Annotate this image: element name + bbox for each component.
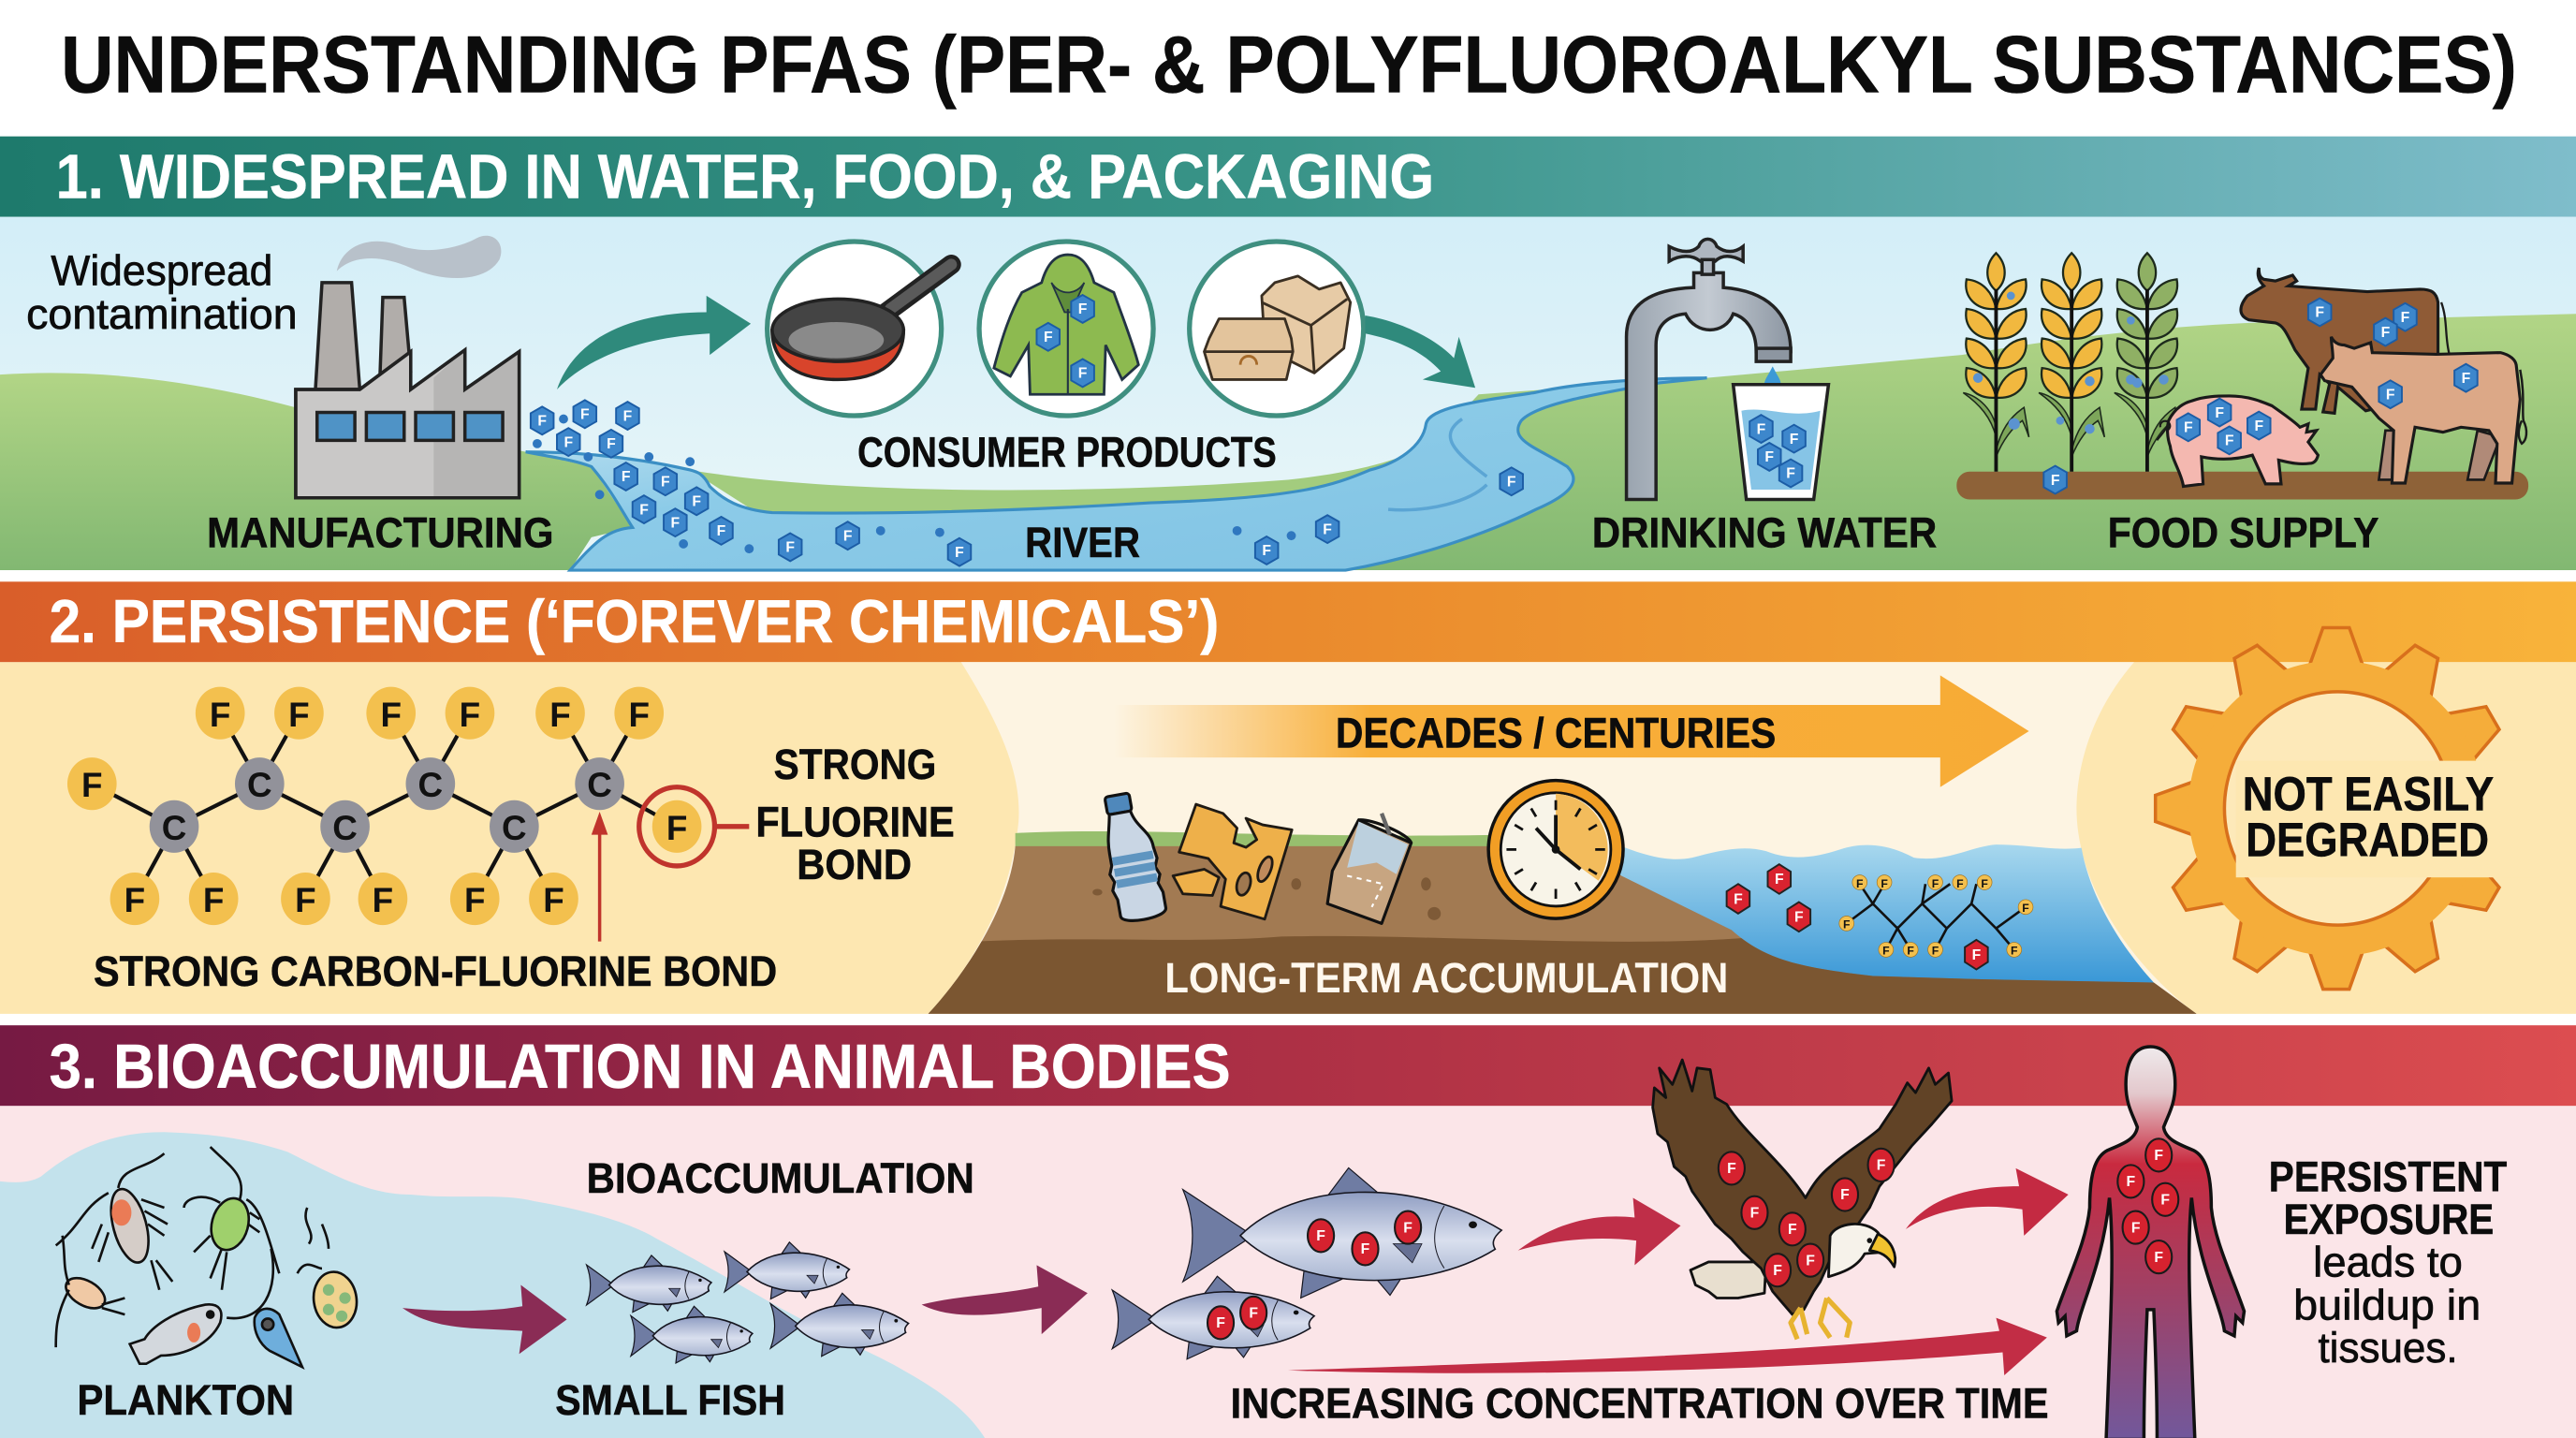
icon: medium fish: F [1216, 1315, 1225, 1331]
PFAS particles leaving factory into river: F [537, 414, 547, 430]
arrow: decades / centuries [1114, 675, 2029, 787]
small PFAS molecule in water: F [2011, 945, 2018, 958]
icon: large fish: F [1316, 1228, 1325, 1244]
soil strip [1956, 472, 2528, 500]
molecule: carbon-fluorine chain: F [124, 881, 145, 919]
icon: eagle: F [1806, 1253, 1815, 1269]
panel: section 3 bioaccumulation [0, 1025, 2576, 1438]
landscape background [0, 217, 2576, 570]
label: increasing concentration over time: INCREASING CONCENTRATION OVER TIME [1231, 1380, 2049, 1428]
icon: pig: F [2254, 418, 2263, 434]
labels section 1 [207, 428, 2378, 566]
icon: plankton group [56, 1147, 360, 1367]
PFAS particles leaving factory into river: F [639, 502, 649, 518]
molecule: carbon-fluorine chain: F [210, 696, 230, 734]
panel: section 2 persistence [0, 581, 2576, 1019]
molecule: carbon-fluorine chain: F [628, 696, 650, 734]
small PFAS molecule in water [1839, 875, 2033, 958]
icon: crops [1963, 253, 2180, 472]
PFAS particles leaving factory into river: F [843, 528, 853, 544]
icon: rain jacket: F [1078, 301, 1088, 317]
labels: strong fluorine bond: BOND [797, 841, 912, 888]
molecule: carbon-fluorine chain: F [288, 696, 310, 734]
river [526, 378, 1707, 570]
molecule: carbon-fluorine chain: C [502, 809, 527, 847]
PFAS hexagons in water: F [1972, 947, 1982, 963]
molecule: carbon-fluorine chain: F [543, 881, 564, 919]
small PFAS molecule in water: F [1981, 877, 1988, 890]
PFAS particles leaving factory into river: F [564, 434, 573, 450]
labels section 1: DRINKING WATER [1592, 508, 1937, 556]
icon: small fish school [587, 1242, 909, 1363]
arrow: fish to eagle [1518, 1197, 1680, 1265]
icon: glass of water: F [1764, 449, 1774, 465]
icon: rain jacket: F [1078, 366, 1088, 382]
molecule: carbon-fluorine chain: C [162, 809, 186, 847]
icon: medium fish: F [1249, 1306, 1258, 1322]
icon: human body: F [2127, 1174, 2136, 1190]
molecule: carbon-fluorine chain: F [549, 696, 571, 734]
icon: pig [2157, 396, 2318, 487]
section 2 heading band [0, 581, 2576, 662]
arrow: products to river [1365, 315, 1475, 388]
section 3 heading band: 3. BIOACCUMULATION IN ANIMAL BODIES [50, 1033, 1231, 1102]
icon: pig: F [2215, 405, 2224, 421]
PFAS particles leaving factory into river [531, 400, 1523, 566]
PFAS particles leaving factory into river: F [622, 469, 631, 485]
label: strong carbon-fluorine bond: STRONG CARBON-FLUORINE BOND [94, 947, 777, 995]
water body [1610, 844, 2154, 986]
icon: glass of water [1734, 385, 1828, 500]
text block: persistent exposure: tissues. [2318, 1324, 2458, 1372]
icon: tap [1627, 239, 1791, 500]
arrow: to carbon-fluorine bond [592, 812, 607, 942]
labels: strong fluorine bond: STRONG [774, 741, 936, 788]
panel: section 1 widespread [0, 137, 2576, 570]
PFAS particles leaving factory into river: F [1323, 521, 1332, 537]
icon: eagle: F [1773, 1263, 1782, 1279]
molecule: carbon-fluorine chain: F [464, 881, 485, 919]
molecule: carbon-fluorine chain: C [418, 766, 443, 804]
molecule: carbon-fluorine chain: F [203, 881, 224, 919]
label: widespread contamination [26, 247, 298, 338]
arrow: factory to products [557, 296, 751, 389]
icon: large fish [1183, 1167, 1501, 1298]
text block: persistent exposure: leads to [2313, 1239, 2463, 1286]
icon: brown cow: F [2401, 310, 2410, 326]
PFAS particles leaving factory into river: F [955, 545, 964, 561]
arrow: increasing concentration [1288, 1318, 2047, 1375]
icon: tan cow [2320, 337, 2526, 483]
small PFAS molecule in water: F [1882, 945, 1890, 958]
icon: food packaging [1190, 242, 1364, 416]
icon: brown cow [2241, 268, 2450, 413]
icon: brown cow: F [2315, 305, 2324, 321]
icon: pig: F [2184, 420, 2193, 436]
icon: tan cow: F [2462, 371, 2471, 387]
icon: human body [2056, 1047, 2244, 1438]
icon: glass of water: F [1790, 432, 1799, 448]
icon: clock [1488, 781, 1623, 918]
icon: large fish: F [1403, 1220, 1412, 1236]
icon: eagle: F [1788, 1222, 1797, 1238]
text block: persistent exposure: EXPOSURE [2284, 1196, 2494, 1243]
molecule: carbon-fluorine chain: F [666, 809, 687, 847]
section 2 heading band: 2. PERSISTENCE (‘FOREVER CHEMICALS’) [50, 587, 1219, 655]
labels: plankton and small fish [77, 1376, 785, 1424]
text block: persistent exposure: buildup in [2293, 1281, 2481, 1328]
label: widespread contamination: Widespread [51, 247, 272, 295]
text block: persistent exposure [2269, 1152, 2507, 1372]
PFAS particles leaving factory into river: F [623, 408, 633, 424]
labels section 1: FOOD SUPPLY [2108, 508, 2378, 556]
small PFAS molecule in water: F [1881, 877, 1888, 890]
molecule: carbon-fluorine chain: F [380, 696, 402, 734]
icon: gear [2156, 627, 2539, 990]
text block: persistent exposure: PERSISTENT [2269, 1152, 2507, 1200]
labels: plankton and small fish: SMALL FISH [555, 1376, 785, 1424]
section 1 heading band [0, 137, 2576, 217]
label: long-term accumulation: LONG-TERM ACCUMULATION [1164, 954, 1728, 1002]
molecule: carbon-fluorine chain: C [332, 809, 358, 847]
section 2 background [0, 662, 2576, 1014]
PFAS particles leaving factory into river: F [607, 436, 616, 452]
molecule: carbon-fluorine chain: C [587, 766, 612, 804]
molecule: carbon-fluorine chain: F [373, 881, 393, 919]
small PFAS molecule in water: F [1907, 945, 1914, 958]
PFAS hexagons in water [1727, 864, 1988, 970]
PFAS particles leaving factory into river: F [661, 475, 670, 491]
water region [0, 1132, 986, 1438]
icon: smoke [337, 236, 501, 278]
PFAS particles leaving factory into river: F [1507, 475, 1516, 491]
PFAS hexagons in water: F [1775, 872, 1784, 888]
label: not easily degraded: DEGRADED [2246, 813, 2489, 866]
labels section 1: RIVER [1025, 519, 1140, 566]
section 3 background [0, 1106, 2576, 1438]
PFAS hexagons in water: F [1794, 910, 1804, 926]
small PFAS molecule in water: F [1932, 877, 1939, 890]
icon: tan cow: F [2386, 387, 2395, 403]
icon: human body: F [2154, 1250, 2163, 1266]
icon: factory [296, 283, 520, 498]
PFAS particles leaving factory into river: F [692, 494, 701, 510]
icon: eagle [1653, 1060, 1952, 1339]
labels: strong fluorine bond [755, 741, 955, 888]
icon: non-stick pan [768, 242, 951, 416]
section 3 heading band [0, 1025, 2576, 1106]
icon: human body: F [2154, 1148, 2163, 1164]
icon: crushed can [1327, 814, 1412, 923]
molecule: carbon-fluorine chain: F [460, 696, 480, 734]
label: bioaccumulation: BIOACCUMULATION [587, 1154, 974, 1202]
icon: large fish: F [1361, 1241, 1370, 1257]
callout ring around fluorine [639, 787, 749, 866]
arrow: eagle to human [1906, 1168, 2069, 1236]
icon: plastic bottle [1096, 790, 1167, 924]
arrow: decades / centuries: DECADES / CENTURIES [1336, 710, 1776, 757]
arrow: small fish to large fish [922, 1265, 1088, 1334]
small PFAS molecule in water: F [1843, 918, 1851, 932]
icon: pig: F [2225, 433, 2234, 449]
icon: human body: F [2131, 1220, 2141, 1236]
molecule: carbon-fluorine chain: C [247, 766, 272, 804]
labels: plankton and small fish: PLANKTON [77, 1376, 294, 1424]
molecule: carbon-fluorine chain [67, 687, 701, 925]
label: not easily degraded: NOT EASILY [2243, 767, 2494, 820]
label: not easily degraded [2243, 767, 2494, 866]
icon: rain jacket: F [1044, 330, 1053, 345]
PFAS hexagons in water: F [1734, 891, 1743, 907]
soil PFAS particle [2043, 466, 2067, 493]
small PFAS molecule in water: F [1932, 945, 1939, 958]
ground layers [920, 831, 2217, 1019]
PFAS particles leaving factory into river: F [671, 515, 681, 531]
icon: glass of water: F [1757, 421, 1766, 437]
icon: eagle: F [1877, 1158, 1886, 1174]
labels section 1: CONSUMER PRODUCTS [857, 428, 1277, 476]
soil PFAS particle: F [2051, 473, 2060, 489]
PFAS particles leaving factory into river: F [1262, 543, 1271, 559]
molecule: carbon-fluorine chain: F [81, 766, 103, 804]
icon: eagle: F [1750, 1206, 1760, 1222]
icon: eagle: F [1840, 1187, 1850, 1203]
icon: glass of water: F [1786, 466, 1795, 482]
PFAS particles leaving factory into river: F [580, 407, 590, 423]
icon: rain jacket [979, 242, 1153, 416]
icon: eagle: F [1727, 1161, 1736, 1177]
small PFAS molecule in water: F [1956, 877, 1964, 890]
icon: medium fish [1112, 1276, 1314, 1359]
icon: brown cow: F [2381, 325, 2391, 341]
labels section 1: MANUFACTURING [207, 508, 553, 556]
labels: strong fluorine bond: FLUORINE [755, 798, 955, 845]
small PFAS molecule in water: F [1856, 877, 1864, 890]
small PFAS molecule in water: F [2022, 902, 2029, 915]
molecule: carbon-fluorine chain: F [295, 881, 316, 919]
label: widespread contamination: contamination [26, 290, 298, 338]
section 1 heading band: 1. WIDESPREAD IN WATER, FOOD, & PACKAGING [56, 142, 1434, 212]
icon: human body: F [2160, 1192, 2170, 1208]
PFAS particles leaving factory into river: F [785, 540, 795, 556]
PFAS particles leaving factory into river: F [717, 523, 726, 539]
icon: degrading package [1173, 804, 1292, 919]
arrow: plankton to small fish [402, 1284, 567, 1354]
